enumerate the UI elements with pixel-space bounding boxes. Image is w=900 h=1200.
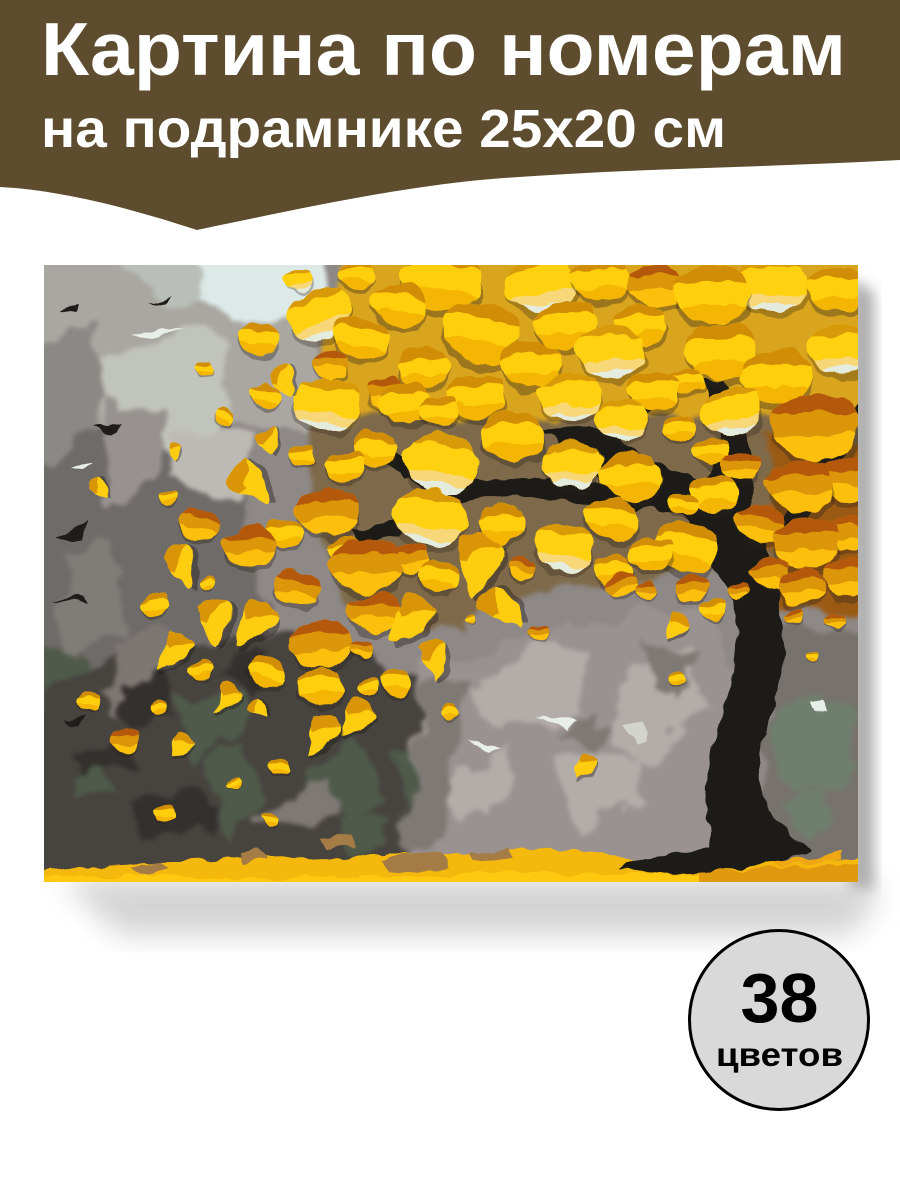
badge circle xyxy=(690,930,868,1110)
brush highlights and dark marks xyxy=(54,297,826,752)
painted background xyxy=(44,265,858,870)
drifting leaves xyxy=(74,309,849,828)
ground with fallen leaves xyxy=(44,834,858,882)
canvas shadow xyxy=(60,278,878,935)
painting base colour xyxy=(44,265,858,882)
title: Картина по номерам xyxy=(41,7,846,91)
header banner xyxy=(0,0,900,230)
canopy underlay xyxy=(306,265,858,634)
badge number: 38 xyxy=(740,959,818,1037)
painting: autumn tree xyxy=(44,265,858,882)
subtitle: на подрамнике 25х20 см xyxy=(41,99,726,159)
badge label: цветов xyxy=(716,1036,843,1073)
tree trunk and branches xyxy=(350,270,858,873)
canopy leaves xyxy=(282,265,858,612)
badge: 38 colours xyxy=(690,930,868,1110)
